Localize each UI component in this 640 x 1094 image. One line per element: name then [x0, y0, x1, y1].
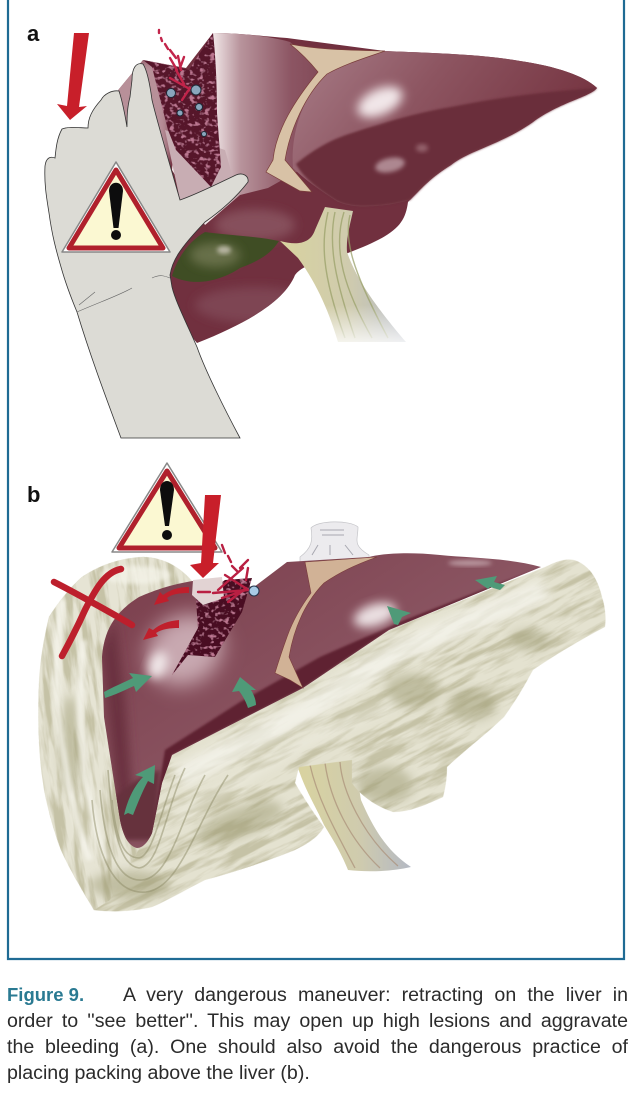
gallbladder — [172, 232, 279, 282]
packing olive shadows — [60, 630, 550, 899]
packing bright central streak — [178, 590, 545, 778]
warning sign b — [112, 463, 222, 552]
small red arrows — [143, 587, 189, 640]
U-fold around liver tip — [92, 768, 228, 892]
red cross — [54, 569, 132, 656]
hand — [45, 64, 248, 438]
left lobe — [172, 33, 330, 225]
caption: A very dangerous maneuver: retracting on the liver in — [123, 984, 628, 1006]
pedicle fade — [325, 305, 415, 345]
green arrows — [104, 576, 505, 815]
red arrow b — [190, 495, 221, 578]
portal pedicle b — [297, 758, 411, 871]
wound b — [172, 577, 259, 675]
cava markings — [312, 530, 353, 555]
blood spray b — [198, 545, 248, 602]
caption — [7, 984, 628, 1084]
packing — [38, 556, 606, 912]
panel label a: a — [27, 21, 40, 46]
caption: order to ''see better''. This may open up high lesions and aggravate — [7, 1010, 628, 1032]
packing band texture — [0, 328, 640, 1094]
falciform ligament — [266, 44, 385, 192]
panel b: liver with perihepatic packing — [38, 462, 606, 912]
caption: the bleeding (a). One should also avoid the dangerous practice of — [7, 1036, 628, 1058]
right dome lobe — [293, 51, 597, 206]
portal pedicle — [280, 207, 406, 342]
lower dark shading of dome — [296, 88, 597, 206]
panel a: liver with retracting hand — [45, 20, 610, 438]
caption: placing packing above the liver (b). — [7, 1062, 310, 1084]
pale lobe below wound — [165, 130, 235, 222]
panel label b: b — [27, 482, 40, 507]
packing left vertical texture — [0, 536, 242, 931]
liver body b — [102, 553, 541, 848]
vena cava stump — [300, 522, 369, 562]
packing top bright patch — [99, 566, 171, 584]
pedicle b streaks — [310, 762, 398, 868]
warning sign a — [62, 162, 170, 252]
wrist creases — [77, 276, 170, 312]
liver shading b — [102, 560, 545, 840]
packing lower bright streak — [180, 700, 400, 815]
falciform ligament b — [275, 557, 377, 688]
dome highlights — [353, 80, 428, 175]
blood spray — [159, 30, 190, 100]
caption: Figure 9. — [7, 984, 84, 1005]
exposed vessels in wound — [166, 85, 206, 136]
liver silhouette — [118, 33, 597, 343]
packing shading overlays — [57, 566, 550, 899]
red arrow a — [57, 33, 89, 120]
pedicle vessel streaks — [324, 212, 388, 338]
laceration — [143, 33, 221, 187]
packing left bright streaks — [57, 600, 105, 860]
